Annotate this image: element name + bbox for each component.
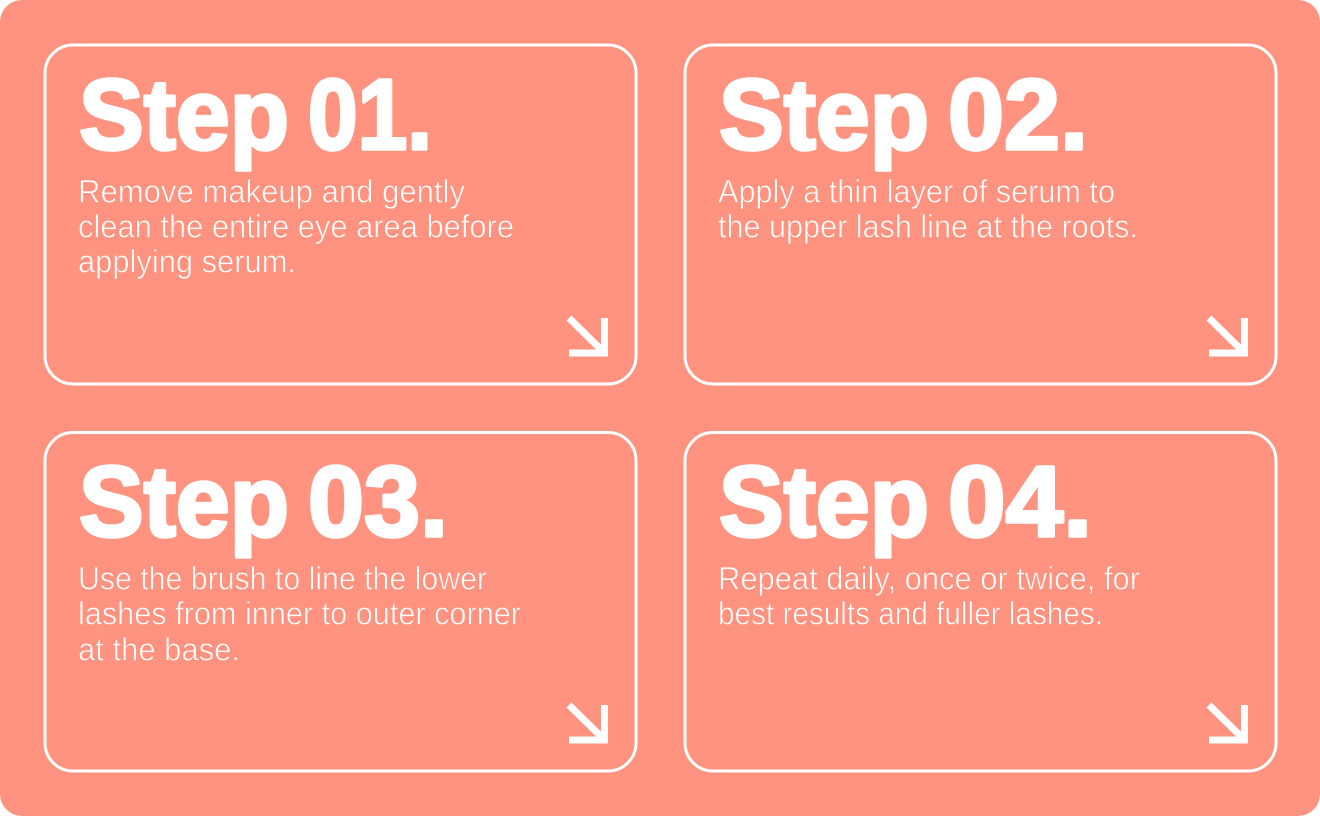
heading: step 03: 03. [308, 446, 448, 558]
heading: step 02: Step [719, 59, 929, 171]
panel: step 04 [685, 432, 1276, 771]
text block: step 02 instructions [718, 174, 1138, 244]
text block: step 03 instructions: lashes from inner to outer corner [78, 596, 521, 632]
heading: step 04 [719, 446, 1092, 558]
card outline 01 [45, 45, 636, 384]
panel: step 01 [45, 45, 636, 384]
panel: step 03 [45, 432, 636, 771]
heading: step 04: 04. [948, 446, 1092, 558]
panel: step 02 [685, 45, 1276, 384]
heading: step 03: Step [79, 446, 289, 558]
text block: step 01 instructions: applying serum. [78, 244, 296, 280]
text block: step 01 instructions: Remove makeup and gently [78, 174, 465, 210]
text block: step 02 instructions: Apply a thin layer of serum to [718, 174, 1115, 210]
text block: step 03 instructions: at the base. [78, 632, 240, 668]
text block: step 01 instructions [78, 174, 514, 280]
heading: step 02 [719, 59, 1088, 171]
heading: step 01: Step [79, 59, 289, 171]
text block: step 04 instructions: Repeat daily, once or twice, for [718, 560, 1140, 596]
arrow: step 01 [569, 318, 604, 353]
card outline 03 [45, 432, 636, 771]
text block: step 03 instructions [78, 560, 521, 668]
text block: step 01 instructions: clean the entire eye area before [78, 208, 514, 244]
heading: step 02: 02. [948, 59, 1088, 171]
text block: step 03 instructions: Use the brush to line the lower [78, 560, 487, 596]
heading: step 01 [79, 59, 432, 171]
text block: step 04 instructions [718, 560, 1140, 632]
heading: step 01: 01. [308, 59, 432, 171]
arrow: step 04 [1209, 705, 1244, 740]
arrow: step 02 [1209, 318, 1244, 353]
card outline 02 [685, 45, 1276, 384]
heading: step 04: Step [719, 446, 929, 558]
text block: step 02 instructions: the upper lash line at the roots. [718, 208, 1138, 244]
heading: step 03 [79, 446, 448, 558]
card outline 04 [685, 432, 1276, 771]
text block: step 04 instructions: best results and fuller lashes. [718, 596, 1103, 632]
arrow: step 03 [569, 705, 604, 740]
